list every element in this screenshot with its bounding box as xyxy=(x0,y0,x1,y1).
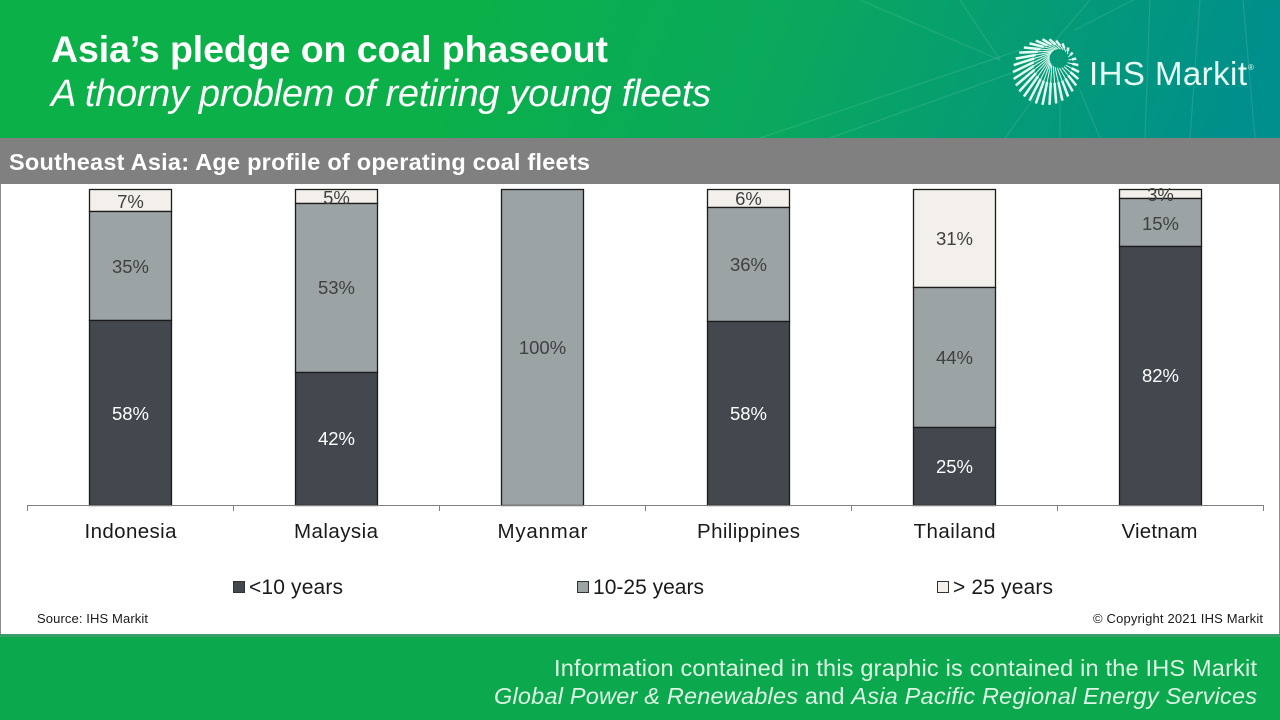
logo wordmark: IHS Markit xyxy=(1089,55,1247,92)
footer text line 2: Global Power & Renewables and Asia Pacific Regional Energy Services xyxy=(494,683,1257,709)
bar: Indonesia: 35% xyxy=(112,256,149,277)
bar: Indonesia xyxy=(90,190,172,506)
category labels: Indonesia xyxy=(84,520,177,543)
category labels: Vietnam xyxy=(1122,520,1198,543)
chart heading: Southeast Asia: Age profile of operating coal fleets xyxy=(9,149,590,175)
bar: Malaysia: 53% xyxy=(318,277,355,298)
bar: Thailand: 44% xyxy=(936,347,973,368)
header banner xyxy=(0,0,1280,138)
category labels: Philippines xyxy=(697,520,800,543)
bar: Vietnam xyxy=(1120,184,1202,506)
bar: Vietnam: 3% xyxy=(1147,184,1174,205)
bar: Vietnam: 15% xyxy=(1142,213,1179,234)
subtitle: A thorny problem of retiring young fleets xyxy=(49,73,711,115)
footer banner xyxy=(0,634,1280,720)
source note: Source: IHS Markit xyxy=(37,611,148,626)
title: Asia’s pledge on coal phaseout xyxy=(51,28,608,70)
bar: Philippines: 36% xyxy=(730,254,767,275)
bar: Myanmar: 100% xyxy=(519,337,566,358)
category axis xyxy=(28,505,1264,511)
bar: Thailand: 31% xyxy=(936,228,973,249)
copyright note: © Copyright 2021 IHS Markit xyxy=(1093,611,1263,626)
bar: Thailand: 25% xyxy=(936,456,973,477)
bar: Philippines: 58% xyxy=(730,403,767,424)
category labels: Myanmar xyxy=(498,520,588,543)
category labels: Thailand xyxy=(914,520,996,543)
bar: Philippines xyxy=(708,188,790,506)
bar: Indonesia: 7% xyxy=(117,191,144,212)
footer text line 1: Information contained in this graphic is contained in the IHS Markit xyxy=(554,655,1257,681)
bar: Myanmar xyxy=(502,190,584,506)
chart heading band xyxy=(0,138,1280,184)
category labels: Malaysia xyxy=(294,520,379,543)
registered mark: ® xyxy=(1248,63,1254,72)
bar: Philippines: 6% xyxy=(735,188,762,209)
bar: Vietnam: 82% xyxy=(1142,365,1179,386)
bar: Malaysia: 42% xyxy=(318,428,355,449)
logo: IHS Markit xyxy=(1013,39,1254,105)
stacked bar chart xyxy=(90,184,1202,506)
panel edges xyxy=(0,184,1280,634)
legend item: over 25 years: > 25 years xyxy=(953,576,1053,599)
bar: Thailand xyxy=(914,190,996,506)
bar: Malaysia: 5% xyxy=(323,187,350,208)
legend xyxy=(234,576,1053,599)
legend item: under 10 years: <10 years xyxy=(249,576,343,599)
category labels xyxy=(84,520,1198,543)
icon: sunburst xyxy=(1013,39,1079,105)
bar: Malaysia xyxy=(296,187,378,506)
legend item: 10-25 years: 10-25 years xyxy=(593,576,704,599)
bar: Indonesia: 58% xyxy=(112,403,149,424)
